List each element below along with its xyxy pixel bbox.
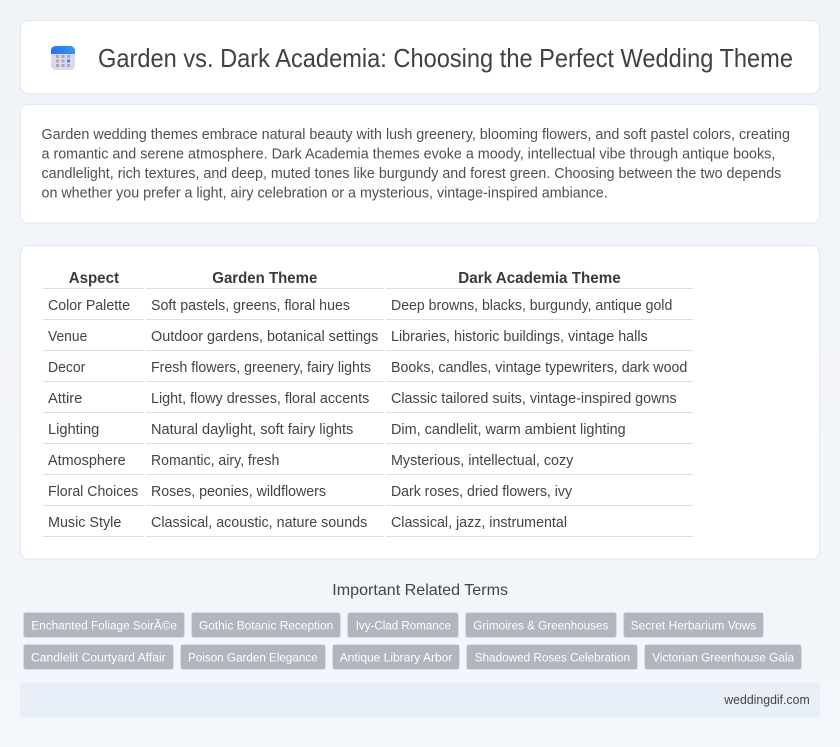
table row: lighting: [43, 422, 693, 444]
tag: [348, 612, 458, 638]
tag: [24, 612, 184, 638]
table row: decor: Fresh flowers, greenery, fairy lights: [151, 360, 371, 376]
table row: lighting: Natural daylight, soft fairy lights: [151, 422, 353, 438]
tag: [466, 644, 638, 670]
table header row: Dark Academia Theme: [458, 270, 621, 287]
table row: attire: Classic tailored suits, vintage-inspired gowns: [391, 391, 677, 407]
table row: floral choices: [43, 484, 693, 506]
table row: venue: [43, 329, 693, 351]
table row: color palette: [43, 298, 693, 320]
tag: Candlelit Courtyard Affair: [31, 650, 166, 664]
text block: description paragraph: [42, 127, 790, 202]
table row: attire: Attire: [48, 391, 82, 407]
panel: comparison table: [20, 246, 820, 559]
table header row: Garden Theme: [212, 270, 317, 287]
tag: Secret Herbarium Vows: [631, 618, 756, 632]
tag: [180, 644, 326, 670]
table header row: Aspect: [69, 270, 120, 287]
tag: Antique Library Arbor: [340, 650, 452, 664]
text block: description paragraph: candlelight, rich textures, and deep, muted tones like burgundy and forest green. Choosing between the two depends: [42, 166, 781, 182]
table row: music style: Classical, jazz, instrumental: [391, 515, 567, 531]
panel: title header: [20, 20, 820, 94]
table row: lighting: Lighting: [48, 422, 99, 438]
tag: Shadowed Roses Celebration: [475, 650, 630, 664]
tag: Ivy-Clad Romance: [356, 618, 451, 632]
tag: [24, 644, 174, 670]
tag: [644, 644, 802, 670]
table row: floral choices: Floral Choices: [48, 484, 138, 500]
table row: color palette: Deep browns, blacks, burgundy, antique gold: [391, 298, 672, 314]
table row: floral choices: Dark roses, dried flowers, ivy: [391, 484, 573, 500]
table row: music style: Classical, acoustic, nature sounds: [151, 515, 367, 531]
table header row: [43, 270, 693, 289]
text block: description paragraph: on whether you prefer a light, airy celebration or a mysterious, vintage-inspired ambiance.: [42, 186, 608, 202]
tag: Gothic Botanic Reception: [199, 618, 333, 632]
table row: atmosphere: Romantic, airy, fresh: [151, 453, 279, 469]
tag: [466, 612, 616, 638]
table row: music style: Music Style: [48, 515, 121, 531]
tag: [624, 612, 764, 638]
title: Garden vs. Dark Academia: Choosing the Perfect Wedding Theme: [98, 45, 793, 73]
table row: atmosphere: Atmosphere: [48, 453, 126, 469]
text block: description paragraph: a romantic and serene atmosphere. Dark Academia themes evoke a moody, intellectual vibe through antique books,: [42, 146, 775, 162]
table row: atmosphere: [43, 453, 693, 475]
table row: attire: [43, 391, 693, 413]
tag: [332, 644, 460, 670]
table row: color palette: Color Palette: [48, 298, 130, 314]
table row: decor: [43, 360, 693, 382]
footer band: [20, 683, 820, 717]
table row: venue: Outdoor gardens, botanical settings: [151, 329, 378, 345]
table row: venue: Venue: [48, 329, 87, 345]
table row: color palette: Soft pastels, greens, floral hues: [151, 298, 350, 314]
tag: Grimoires & Greenhouses: [473, 618, 608, 632]
table row: decor: Books, candles, vintage typewriters, dark wood: [391, 360, 687, 376]
text block: description paragraph: Garden wedding themes embrace natural beauty with lush greenery, blooming flowers, and soft pastel colors, creating: [42, 127, 790, 143]
tag: Enchanted Foliage SoirÃ©e: [31, 618, 177, 632]
tag: Poison Garden Elegance: [188, 650, 318, 664]
table row: venue: Libraries, historic buildings, vintage halls: [391, 329, 648, 345]
tag: Victorian Greenhouse Gala: [652, 650, 794, 664]
table row: decor: Decor: [48, 360, 85, 376]
table row: lighting: Dim, candlelit, warm ambient lighting: [391, 422, 626, 438]
panel: description: [20, 104, 820, 223]
table row: atmosphere: Mysterious, intellectual, cozy: [391, 453, 574, 469]
table row: music style: [43, 515, 693, 537]
table row: attire: Light, flowy dresses, floral accents: [151, 391, 369, 407]
tag: [192, 612, 340, 638]
heading: important related terms: Important Related Terms: [332, 582, 508, 599]
table row: floral choices: Roses, peonies, wildflowers: [151, 484, 326, 500]
footer source text: weddingdif.com: [723, 693, 810, 707]
related term tags: [24, 612, 802, 670]
icon: calendar: [51, 46, 75, 70]
